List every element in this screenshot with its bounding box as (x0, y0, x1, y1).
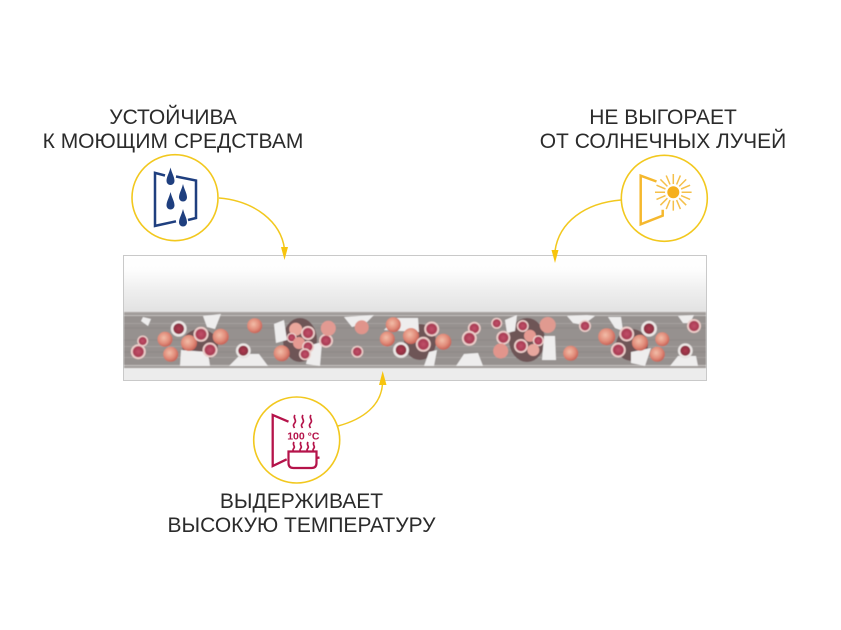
dark clusters behind fruit (182, 318, 648, 362)
icon: window with detergent drops (132, 155, 218, 241)
napkins (141, 314, 698, 366)
title: does not fade in sunlight: ОТ СОЛНЕЧНЫХ ЛУЧЕЙ (540, 129, 786, 153)
arrow: detergents to panel (219, 198, 288, 260)
pomegranates and apples: right half (416, 317, 701, 362)
pomegranates and apples: left half (131, 317, 419, 362)
title: withstands high temperature: ВЫДЕРЖИВАЕТ (220, 490, 383, 513)
arrow: sunlight to panel (552, 200, 621, 263)
panel: kitchen backsplash (124, 256, 706, 380)
icon: steaming pot with 100 °C: 100 °C (287, 430, 320, 442)
icon: window with sun (621, 155, 707, 241)
arrow: temperature to panel (338, 371, 386, 426)
title: resistant to detergents: УСТОЙЧИВА (109, 106, 237, 129)
title: resistant to detergents: К МОЮЩИМ СРЕДСТВАМ (43, 130, 303, 153)
title: does not fade in sunlight: НЕ ВЫГОРАЕТ (589, 106, 737, 129)
title: withstands high temperature: ВЫСОКУЮ ТЕМПЕРАТУРУ (168, 514, 436, 537)
icon: steaming pot with 100 °C (254, 397, 340, 483)
